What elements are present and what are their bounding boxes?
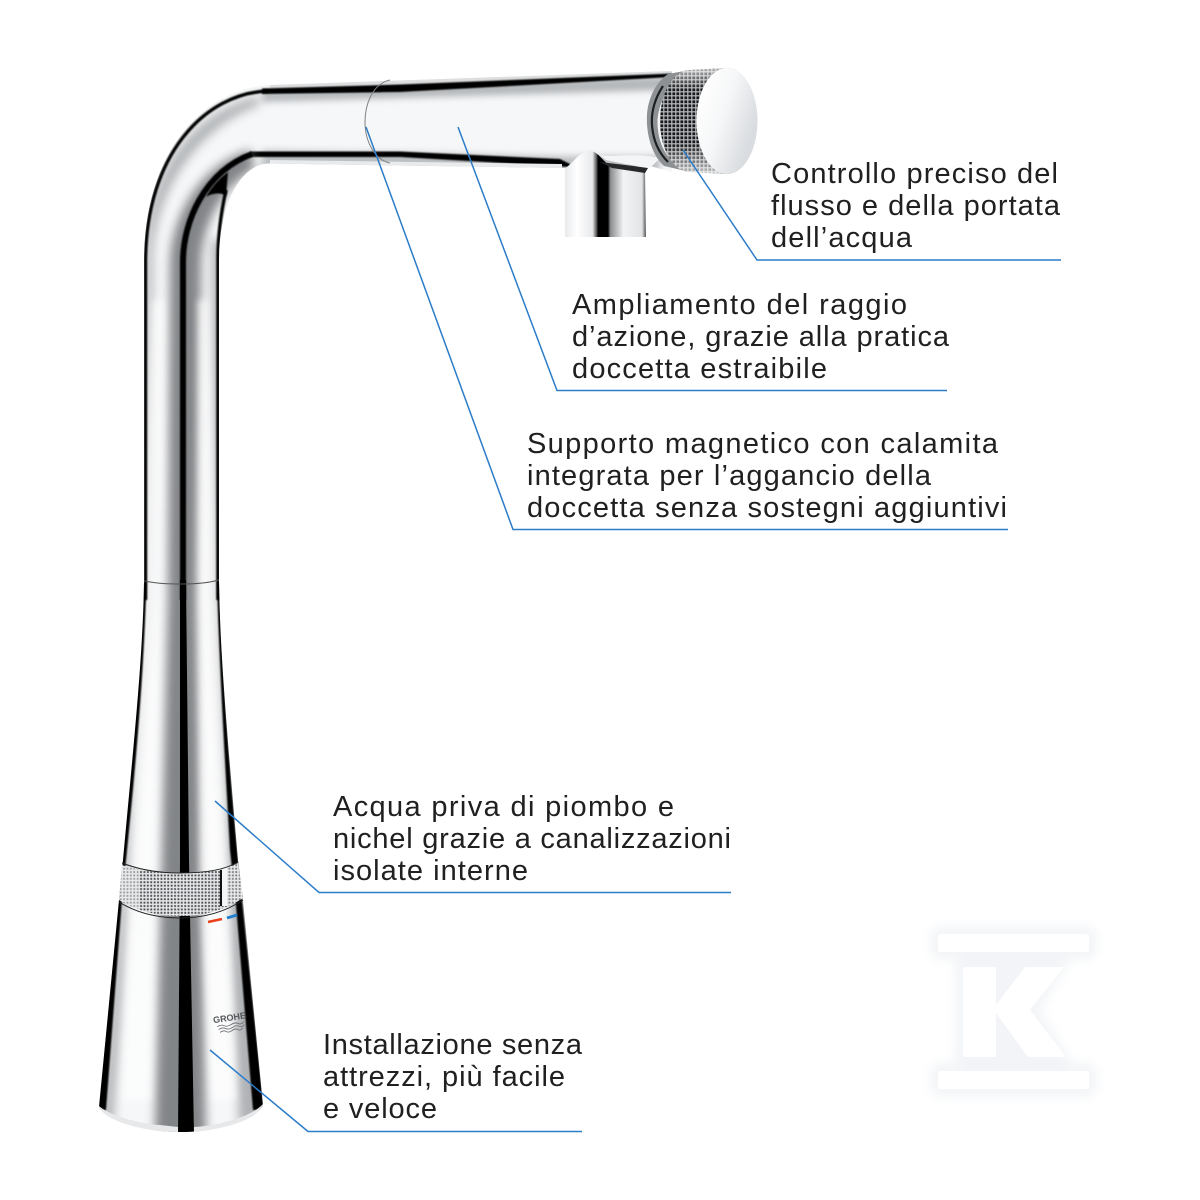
- light highlights: [122, 300, 236, 1100]
- callout: lead-free water: [215, 791, 731, 892]
- callout: pull-out spray: Ampliamento del raggio: [572, 289, 907, 321]
- column and flare shading: [100, 96, 264, 1140]
- callout: magnetic dock: doccetta senza sostegni aggiuntivi: [527, 492, 1007, 524]
- callout: lead-free water: isolate interne: [333, 855, 528, 887]
- callout: flow control: Controllo preciso del: [771, 158, 1058, 190]
- knob face: [696, 68, 758, 174]
- callout: pull-out spray: [458, 127, 950, 390]
- outer bend dark edge: [146, 91, 268, 600]
- tube shading (head): [262, 76, 672, 172]
- ring collar with knurling: [118, 860, 245, 920]
- callout: magnetic dock: Supporto magnetico con calamita: [527, 428, 999, 460]
- callout: tool-free installation: attrezzi, più facile: [323, 1061, 565, 1093]
- spout outlet: [565, 151, 660, 237]
- inner bend dark stripe: [183, 154, 252, 600]
- watermark logo: [930, 926, 1097, 1097]
- knob collar: [647, 70, 690, 172]
- callout: magnetic dock: [366, 127, 1008, 530]
- callout: flow control: flusso e della portata: [771, 190, 1061, 222]
- callout: tool-free installation: Installazione senza: [323, 1029, 583, 1061]
- callout: flow control: dell’acqua: [771, 222, 913, 254]
- GROHE logo: GROHE: [212, 1010, 247, 1025]
- callout: pull-out spray: d’azione, grazie alla pratica: [572, 321, 950, 353]
- faucet: [90, 60, 760, 1140]
- callout: magnetic dock: integrata per l’aggancio della: [527, 460, 932, 492]
- callout: tool-free installation: [210, 1029, 583, 1132]
- callout: tool-free installation: e veloce: [323, 1093, 437, 1125]
- callout: lead-free water: nichel grazie a canalizzazioni: [333, 823, 731, 855]
- column seam: [144, 580, 219, 584]
- head seam: [365, 80, 390, 163]
- hot mark: [208, 919, 222, 922]
- callout: pull-out spray: doccetta estraibile: [572, 353, 827, 385]
- callout: flow control: [683, 150, 1061, 260]
- control knob: [646, 68, 758, 174]
- faucet body: column, bend and head tube: [90, 60, 690, 1140]
- callout: lead-free water: Acqua priva di piombo e: [333, 791, 674, 823]
- center stripe on flare: [178, 580, 194, 1135]
- GROHE logo: [212, 1010, 248, 1034]
- cold mark: [227, 915, 237, 918]
- base bottom lip: [99, 1104, 263, 1132]
- knurled band: [660, 68, 746, 174]
